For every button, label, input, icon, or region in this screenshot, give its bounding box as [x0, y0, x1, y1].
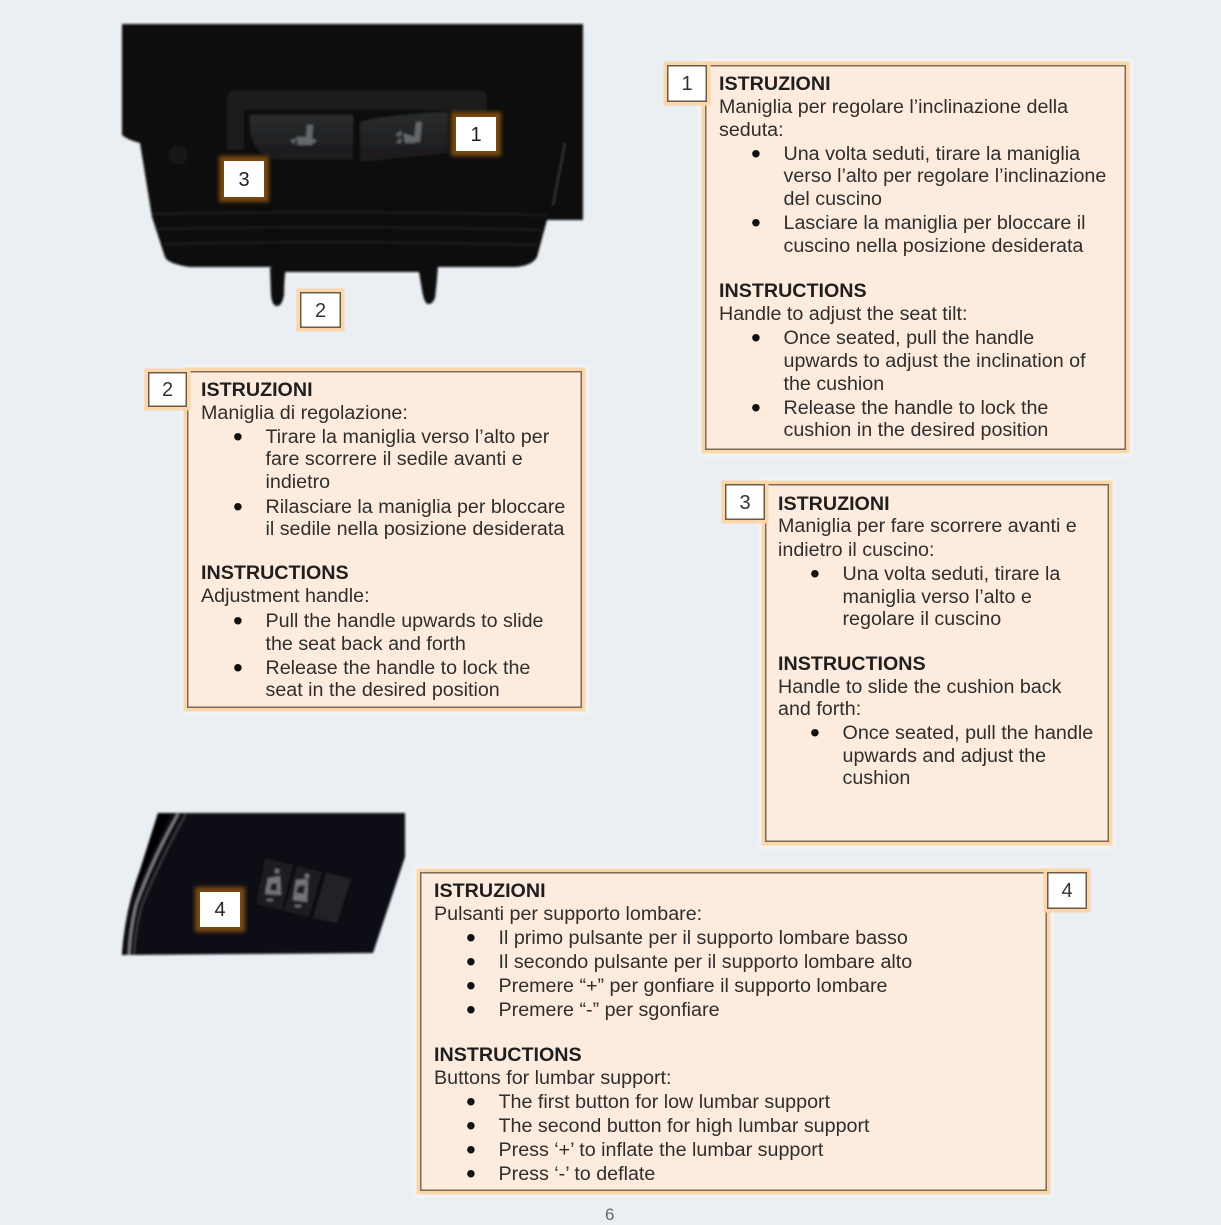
- text block: Italian instructions 4: Il secondo pulsante per il supporto lombare alto: [498, 951, 912, 973]
- badge: photo marker 2: 2: [315, 300, 326, 322]
- text block: Italian instructions 2: il sedile nella posizione desiderata: [266, 518, 564, 540]
- text block: English instructions 4: [434, 1044, 870, 1189]
- text block: English instructions 2: Adjustment handle:: [201, 585, 370, 607]
- badge: panel number 1: [667, 65, 707, 102]
- text block: Italian instructions 4: Pulsanti per supporto lombare:: [434, 903, 702, 925]
- text block: Italian instructions 1: Maniglia per regolare l’inclinazione della: [719, 96, 1068, 118]
- text block: Italian instructions 4: [434, 880, 912, 1025]
- text block: English instructions 3: [778, 653, 1093, 789]
- text block: Italian instructions 2: •: [233, 421, 243, 452]
- panel: instructions 2: [187, 371, 582, 708]
- panel: instructions 1: [705, 65, 1126, 450]
- text block: Italian instructions 3: •: [810, 558, 820, 589]
- text block: Italian instructions 3: [778, 493, 1077, 630]
- panel: instructions 4: [420, 872, 1047, 1191]
- text block: English instructions 3: Once seated, pull the handle: [842, 722, 1093, 744]
- text block: Italian instructions 2: •: [233, 491, 243, 522]
- text block: English instructions 4: •: [466, 1110, 476, 1141]
- badge: photo marker 4: [200, 892, 240, 927]
- text block: Italian instructions 2: ISTRUZIONI: [201, 379, 313, 401]
- text block: Italian instructions 3: maniglia verso l’alto e: [842, 586, 1032, 608]
- text block: Italian instructions 1: •: [751, 207, 761, 238]
- icon: seat tilt symbol: [395, 122, 422, 143]
- text block: English instructions 1: •: [751, 392, 761, 423]
- badge: panel number 3: [725, 484, 765, 520]
- text block: Italian instructions 3: Maniglia per fare scorrere avanti e: [778, 515, 1077, 537]
- text block: Italian instructions 4: •: [466, 970, 476, 1001]
- text block: English instructions 3: INSTRUCTIONS: [778, 653, 926, 675]
- text block: English instructions 2: Release the handle to lock the: [266, 657, 530, 679]
- text block: English instructions 4: The first button for low lumbar support: [498, 1091, 830, 1113]
- photo: lumbar support buttons: [120, 811, 407, 957]
- text block: English instructions 2: INSTRUCTIONS: [201, 562, 349, 584]
- text block: English instructions 1: INSTRUCTIONS: [719, 280, 867, 302]
- text block: English instructions 4: •: [466, 1086, 476, 1117]
- text block: Italian instructions 1: seduta:: [719, 119, 784, 141]
- text block: Italian instructions 2: Rilasciare la maniglia per bloccare: [266, 496, 565, 518]
- badge: panel number 4: [1047, 872, 1087, 909]
- text block: English instructions 3: •: [810, 717, 820, 748]
- text block: English instructions 3: and forth:: [778, 698, 861, 720]
- text block: Italian instructions 1: ISTRUZIONI: [719, 73, 831, 95]
- panel: instructions 3: [765, 484, 1109, 842]
- badge: panel number 3: 3: [739, 492, 751, 514]
- badge: panel number 1: 1: [681, 73, 693, 95]
- page number: 6: [605, 1205, 614, 1224]
- icon: seat slide symbol: [290, 125, 317, 145]
- badge: panel number 2: [148, 372, 187, 407]
- text block: English instructions 2: the seat back and forth: [266, 633, 466, 655]
- text block: Italian instructions 1: Una volta seduti, tirare la maniglia: [784, 143, 1080, 165]
- badge: photo marker 2: [300, 292, 341, 328]
- text block: Italian instructions 3: ISTRUZIONI: [778, 493, 890, 515]
- text block: English instructions 4: Press ‘-’ to deflate: [498, 1163, 655, 1185]
- text block: English instructions 2: seat in the desired position: [266, 679, 500, 701]
- text block: Italian instructions 4: ISTRUZIONI: [434, 880, 546, 902]
- text block: Italian instructions 1: cuscino nella posizione desiderata: [784, 235, 1083, 257]
- text block: English instructions 4: •: [466, 1158, 476, 1189]
- text block: English instructions 1: the cushion: [784, 373, 884, 395]
- icon: lumbar buttons: [253, 855, 353, 925]
- text block: Italian instructions 1: del cuscino: [784, 188, 882, 210]
- badge: photo marker 4: 4: [214, 899, 226, 921]
- text block: Italian instructions 4: •: [466, 994, 476, 1025]
- text block: Italian instructions 4: •: [466, 922, 476, 953]
- text block: Italian instructions 3: regolare il cuscino: [842, 608, 1001, 630]
- text block: English instructions 1: cushion in the desired position: [784, 419, 1048, 441]
- badge: photo marker 3: 3: [238, 169, 250, 191]
- text block: English instructions 2: •: [233, 605, 243, 636]
- text block: English instructions 1: Once seated, pull the handle: [784, 327, 1034, 349]
- handle: right leg: [418, 266, 438, 304]
- text block: English instructions 2: Pull the handle upwards to slide: [266, 610, 544, 632]
- badge: photo marker 3: [224, 161, 264, 197]
- text block: Italian instructions 1: Lasciare la maniglia per bloccare il: [784, 212, 1086, 234]
- text block: Italian instructions 2: [201, 379, 565, 540]
- text block: Italian instructions 4: Premere “+” per gonfiare il supporto lombare: [498, 975, 888, 997]
- text block: Italian instructions 4: Premere “-” per sgonfiare: [498, 999, 720, 1021]
- photo: seat side with adjustment handles: [120, 22, 585, 308]
- text block: Italian instructions 2: Tirare la maniglia verso l’alto per: [266, 426, 549, 448]
- text block: English instructions 3: upwards and adjust the: [842, 745, 1046, 767]
- text block: English instructions 4: •: [466, 1134, 476, 1165]
- text block: English instructions 1: •: [751, 322, 761, 353]
- text block: English instructions 1: [719, 280, 1086, 441]
- badge: photo marker 1: [456, 117, 496, 151]
- handle: left leg: [270, 266, 286, 306]
- badge: photo marker 1: 1: [470, 124, 482, 146]
- text block: Italian instructions 2: indietro: [266, 471, 330, 493]
- text block: English instructions 4: Press ‘+’ to inflate the lumbar support: [498, 1139, 823, 1161]
- text block: Italian instructions 3: indietro il cuscino:: [778, 539, 934, 561]
- text block: English instructions 2: •: [233, 652, 243, 683]
- text block: Italian instructions 4: •: [466, 946, 476, 977]
- text block: English instructions 1: upwards to adjust the inclination of: [784, 350, 1086, 372]
- text block: English instructions 4: Buttons for lumbar support:: [434, 1067, 671, 1089]
- text block: English instructions 3: cushion: [842, 767, 910, 789]
- text block: Italian instructions 4: Il primo pulsante per il supporto lombare basso: [498, 927, 908, 949]
- text block: Italian instructions 3: Una volta seduti, tirare la: [842, 563, 1060, 585]
- text block: Italian instructions 1: •: [751, 138, 761, 169]
- text block: Italian instructions 1: verso l’alto per regolare l’inclinazione: [784, 165, 1106, 187]
- text block: English instructions 1: Release the handle to lock the: [784, 397, 1048, 419]
- text block: English instructions 2: [201, 562, 544, 701]
- text block: English instructions 3: Handle to slide the cushion back: [778, 676, 1061, 698]
- text block: English instructions 4: INSTRUCTIONS: [434, 1044, 582, 1066]
- badge: panel number 2: 2: [162, 379, 173, 401]
- badge: panel number 4: 4: [1061, 880, 1073, 902]
- text block: Italian instructions 1: [719, 73, 1106, 257]
- text block: Italian instructions 2: fare scorrere il sedile avanti e: [266, 448, 523, 470]
- text block: Italian instructions 2: Maniglia di regolazione:: [201, 402, 408, 424]
- text block: English instructions 4: The second button for high lumbar support: [498, 1115, 870, 1137]
- text block: English instructions 1: Handle to adjust the seat tilt:: [719, 303, 967, 325]
